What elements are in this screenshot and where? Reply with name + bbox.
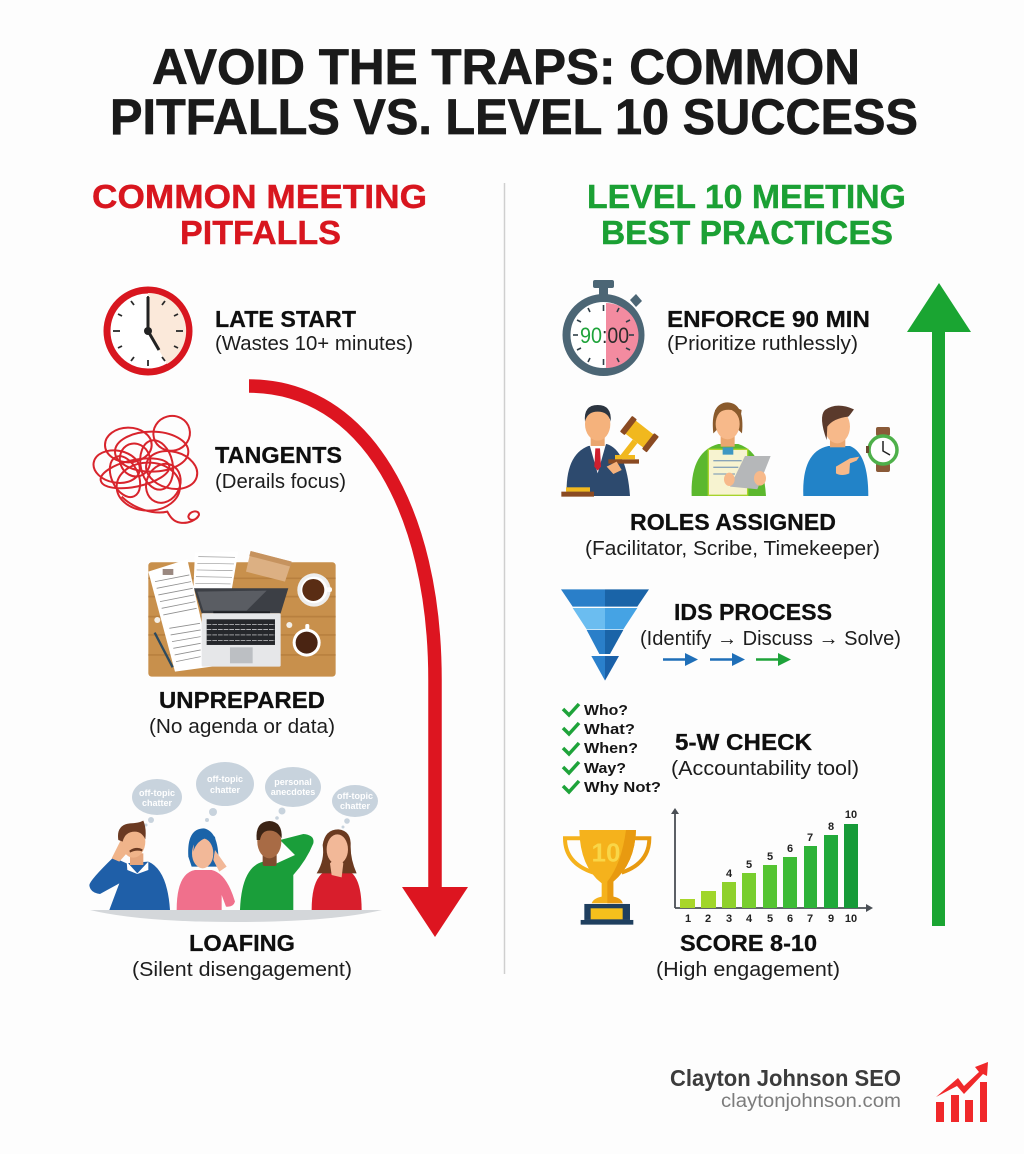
bar chart: score climbing to 10: 4 xyxy=(726,868,733,880)
text: tangents xyxy=(215,442,346,493)
icon: gold trophy xyxy=(565,830,649,925)
title xyxy=(110,39,918,145)
icon: red growth logo xyxy=(936,1062,988,1122)
bar chart: score climbing to 10: 9 xyxy=(828,913,834,925)
bar chart: score climbing to 10: 7 xyxy=(807,913,813,925)
text: loafing: LOAFING xyxy=(189,930,295,956)
thought bubble: off-topic chatter centre: chatter xyxy=(210,785,240,795)
text: IDS process xyxy=(640,599,901,650)
text: loafing xyxy=(132,930,352,981)
bar chart: score climbing to 10: 4 xyxy=(746,913,753,925)
text: 5-W check: 5-W CHECK xyxy=(675,729,812,755)
text: tangents: TANGENTS xyxy=(215,442,342,468)
text: late start xyxy=(215,306,413,355)
bar chart: score climbing to 10: 8 xyxy=(828,821,834,833)
checklist: five W questions: Why Not? xyxy=(584,779,661,796)
table xyxy=(90,910,382,922)
thought bubble: personal anecdotes: personal xyxy=(274,777,312,787)
footer brand text: Clayton Johnson SEO xyxy=(670,1065,901,1091)
icon: gold trophy: 10 xyxy=(592,838,620,868)
thought bubble: off-topic chatter right xyxy=(332,785,378,828)
thought bubble: off-topic chatter right: off-topic xyxy=(337,791,373,801)
bar chart: score climbing to 10: 3 xyxy=(726,913,732,925)
bar chart: score climbing to 10: 10 xyxy=(845,913,857,925)
bar chart: score climbing to 10: 5 xyxy=(767,913,773,925)
text: roles assigned xyxy=(585,509,880,560)
text: enforce 90 min xyxy=(667,306,870,355)
heading: level 10 best practices xyxy=(587,179,906,252)
text: late start: LATE START xyxy=(215,306,356,332)
icon: stopwatch: 90 xyxy=(580,323,602,348)
icon: tangled scribble xyxy=(91,412,202,523)
thought bubble: off-topic chatter centre xyxy=(196,762,254,822)
heading: level 10 best practices: BEST PRACTICES xyxy=(601,215,893,252)
bar chart: score climbing to 10: 6 xyxy=(787,843,793,855)
text: roles assigned: (Facilitator, Scribe, Timekeeper) xyxy=(585,538,880,560)
footer brand text: claytonjohnson.com xyxy=(721,1091,901,1112)
text: score 8-10 xyxy=(656,930,840,981)
title: PITFALLS VS. LEVEL 10 SUCCESS xyxy=(110,89,918,145)
footer brand text xyxy=(670,1065,901,1112)
icon: wrist watch xyxy=(866,427,897,472)
text: 5-W check xyxy=(671,729,859,780)
arrows: process steps xyxy=(663,653,791,666)
arrow: green upward xyxy=(907,283,971,926)
icon: stopwatch xyxy=(566,280,642,372)
bar chart: score climbing to 10: 2 xyxy=(705,913,711,925)
heading: common meeting pitfalls: COMMON MEETING xyxy=(92,179,427,216)
heading: common meeting pitfalls: PITFALLS xyxy=(180,215,341,252)
text: 5-W check: (Accountability tool) xyxy=(671,758,859,780)
text: tangents: (Derails focus) xyxy=(215,471,346,493)
icon: stopwatch: :00 xyxy=(602,323,629,348)
bar chart: score climbing to 10: 5 xyxy=(746,859,752,871)
text: unprepared: (No agenda or data) xyxy=(149,716,335,738)
text: score 8-10: (High engagement) xyxy=(656,959,840,981)
illustration: three meeting roles xyxy=(561,402,897,497)
thought bubble: off-topic chatter left xyxy=(132,779,182,826)
figure: facilitator with gavel xyxy=(561,405,659,497)
bar chart: score climbing to 10: 6 xyxy=(787,913,793,925)
text: unprepared xyxy=(149,687,335,738)
heading: common meeting pitfalls xyxy=(92,179,427,252)
icon: IDS funnel xyxy=(561,589,649,681)
bar chart: score climbing to 10: 5 xyxy=(767,851,773,863)
checklist: five W questions xyxy=(563,702,661,796)
icon: messy desk with laptop xyxy=(148,551,336,677)
heading: level 10 best practices: LEVEL 10 MEETING xyxy=(587,179,906,216)
checklist: five W questions: Who? xyxy=(584,702,628,719)
text: roles assigned: ROLES ASSIGNED xyxy=(630,509,836,535)
checklist: five W questions: When? xyxy=(584,740,638,757)
thought bubble: off-topic chatter left: chatter xyxy=(142,798,172,808)
figure: timekeeper with watch xyxy=(803,406,868,496)
text: enforce 90 min: (Prioritize ruthlessly) xyxy=(667,333,858,355)
arrow: red downward curve xyxy=(249,386,468,937)
thought bubble: off-topic chatter left: off-topic xyxy=(139,788,175,798)
text: late start: (Wastes 10+ minutes) xyxy=(215,333,413,355)
title: AVOID THE TRAPS: COMMON xyxy=(152,39,860,95)
text: unprepared: UNPREPARED xyxy=(159,687,325,713)
figure: scribe with clipboard xyxy=(692,402,771,496)
thought bubble: off-topic chatter right: chatter xyxy=(340,801,370,811)
text: IDS process: (Identify → Discuss → Solve) xyxy=(640,628,901,650)
icon: wall clock xyxy=(107,290,189,372)
people row xyxy=(89,821,362,910)
text: loafing: (Silent disengagement) xyxy=(132,959,352,981)
thought bubble: personal anecdotes xyxy=(265,767,321,820)
text: IDS process: IDS PROCESS xyxy=(674,599,832,625)
bar chart: score climbing to 10 xyxy=(671,808,873,925)
text: score 8-10: SCORE 8-10 xyxy=(680,930,817,956)
bar chart: score climbing to 10: 10 xyxy=(845,809,857,821)
thought bubble: off-topic chatter centre: off-topic xyxy=(207,774,243,784)
bar chart: score climbing to 10: 1 xyxy=(685,913,691,925)
illustration: disengaged people with thought bubbles xyxy=(89,762,382,922)
bar chart: score climbing to 10: 7 xyxy=(807,832,813,844)
checklist: five W questions: What? xyxy=(584,721,635,738)
text: enforce 90 min: ENFORCE 90 MIN xyxy=(667,306,870,332)
checklist: five W questions: Way? xyxy=(584,760,626,777)
thought bubble: personal anecdotes: anecdotes xyxy=(271,787,315,797)
